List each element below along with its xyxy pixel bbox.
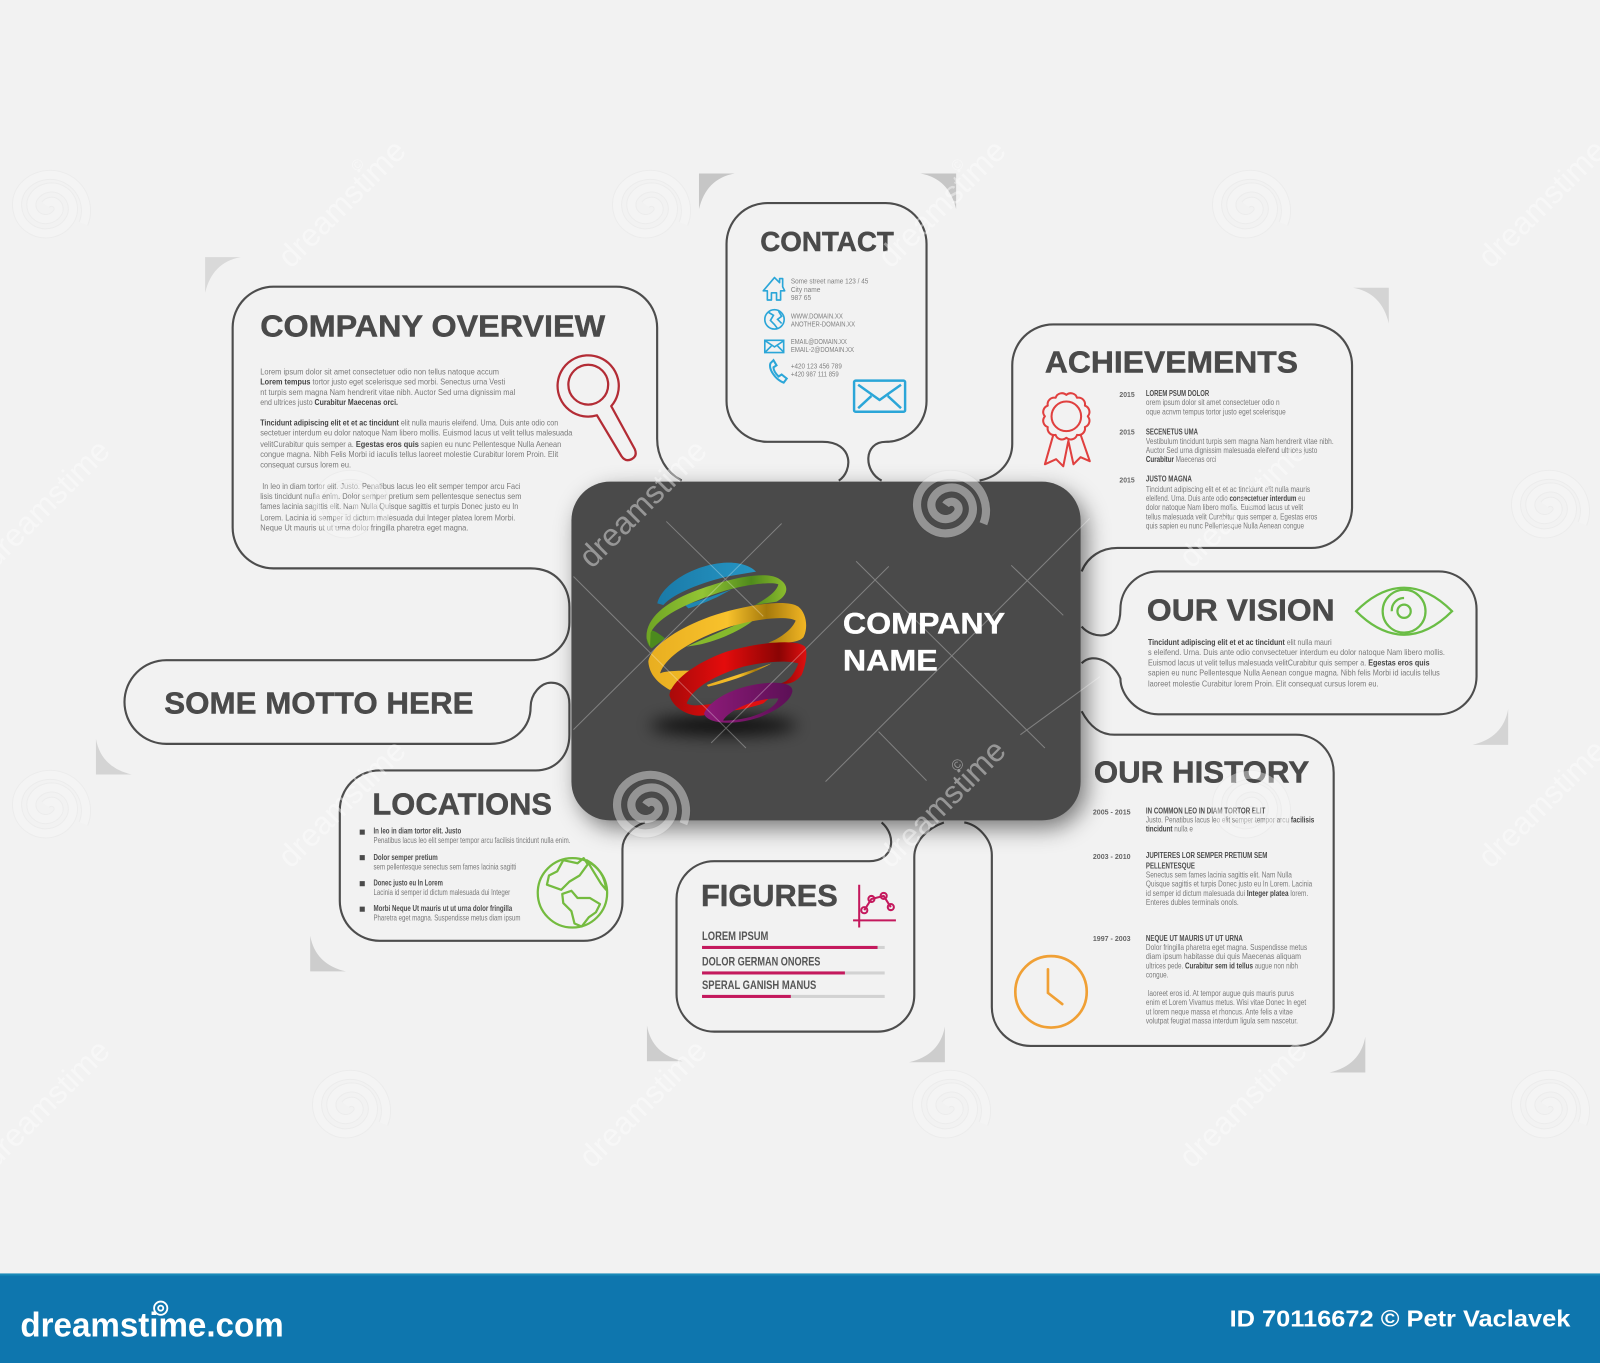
logo: ribbon sphere [646,563,806,736]
text block: overview paragraphs: end ultrices justo Curabitur Maecenas orci. [260,397,398,407]
text block: history timeline: id semper id dictum malesuada dui Integer platea lorem. [1146,888,1308,898]
text block: overview paragraphs: sectetuer interdum eu dolor natoque Nam libero mollis. Euismod lacus ut velit tellus malesuada [260,428,573,438]
heading: figures: FIGURES [701,879,838,913]
heading: our history: OUR HISTORY [1094,756,1309,790]
text block: contact details: EMAIL@DOMAIN.XX [791,337,847,346]
outline: contact [727,203,927,481]
text block: overview paragraphs: consequat cursus lorem eu. [260,459,351,469]
text block: overview paragraphs: lisis tincidunt nulla enim. Dolor semper pretium sem pellentesque senectus sem [260,491,521,501]
footer credit: ID 70116672 © Petr Vaclavek [1230,1306,1571,1332]
text block: achievement timeline: SECENETUS UMA [1146,428,1198,437]
bar chart: DOLOR GERMAN ONORES [702,955,821,968]
text block: history timeline: diam ipsum habitasse dui quis Maecenas aliquam [1146,951,1301,961]
icon: magnifier [558,355,636,460]
icon: small mail [765,340,784,353]
central dark card [571,482,1087,829]
text block: vision: Tincidunt adipiscing elit et et ac tincidunt elit nulla mauri [1148,637,1332,647]
heading: our vision: OUR VISION [1147,593,1335,627]
watermark wordmarks: dreamstime [1171,1032,1314,1174]
text block: location list: Pharetra eget magna. Suspendisse metus diam ipsum [373,912,520,922]
text block: history timeline: laoreet eros id. At tempor augue quis mauris purus [1148,988,1294,998]
text block: overview paragraphs: Lorem ipsum dolor sit amet consectetuer odio non tellus natoque accum [260,366,499,376]
text block: history timeline: NEQUE UT MAURIS UT UT URNA [1146,934,1243,943]
watermark wordmarks: © [348,155,368,175]
text block: achievement timeline: tellus malesuada velit Curabitur quis semper a. Egestas eros [1146,511,1317,521]
text block: history timeline: JUPITERES LOR SEMPER PRETIUM SEM [1146,851,1267,860]
text block: location list: Morbi Neque Ut mauris ut ut urna dolor fringilla [373,904,513,913]
text block: achievement timeline: orem ipsum dolor sit amet consectetuer odio n [1146,397,1280,407]
watermark wordmarks: © [948,155,968,175]
text block: achievement timeline: Curabitur Maecenas orci [1146,454,1216,464]
text block: vision: s eleifend. Urna. Duis ante odio convsectetuer interdum eu dolor natoque Nam libero mollis. [1148,647,1445,657]
panel: motto: SOME MOTTO HERE [164,686,473,720]
folded corner accents [96,173,1508,1072]
footer banner [0,1273,1600,1363]
text block: overview paragraphs: Lorem. Lacinia id semper id dictum malesuada dui Integer platea lorem Morbi. [260,512,515,522]
company name: NAME [843,644,938,677]
panel: locations [360,787,607,928]
text block: contact details: City name [791,285,820,294]
text block: overview paragraphs: Lorem tempus tortor justo eget scelerisque sed morbi. Senectus urna Vesti [260,377,505,387]
heading: achievements: ACHIEVEMENTS [1045,345,1298,379]
text block: overview paragraphs: Tincidunt adipiscing elit et et ac tincidunt elit nulla mauris eleifend. Urna. Duis ante odio con [260,418,558,428]
text block: achievement timeline [1119,389,1334,531]
text block: contact details: 987 65 [791,293,811,302]
text block: history timeline: congue. [1146,970,1168,980]
icon: clock [1015,956,1087,1028]
bar chart: LOREM IPSUM [702,930,768,943]
heading: contact: CONTACT [760,226,894,257]
outline: figures [677,822,944,1032]
watermark wordmarks: dreamstime [870,132,1013,274]
text block: achievement timeline: 2015 [1119,476,1135,485]
text block: contact details [791,277,868,379]
text block: history timeline: ultrices pede. Curabitur sem id tellus augue non nibh [1146,960,1298,970]
text block: history timeline: PELLENTESQUE [1146,861,1195,870]
text block: history timeline: 2005 - 2015 [1093,807,1131,816]
text block: contact details: ANOTHER-DOMAIN.XX [791,320,855,329]
text block: history timeline: Justo. Penatibus lacus leo elit semper tempor arcu facilisis [1146,814,1315,824]
text block: achievement timeline: eleifend. Urna. Duis ante odio consectetuer interdum eu [1146,493,1305,503]
text block: history timeline: 1997 - 2003 [1093,934,1131,943]
company name: COMPANY [843,608,1005,641]
text block: history timeline: enim et Lorem Vivamus metus. Wisi vitae Donec In eget [1146,997,1307,1007]
icon: award ribbon [1043,393,1090,466]
text block: history timeline: tincidunt nulla e [1146,824,1193,834]
text block: history timeline: Senectus sem fames lacinia sagittis elit. Nam Nulla [1146,870,1292,880]
text block: overview paragraphs: nt turpis sem magna Nam hendrerit vitae nibh. Auctor Sed urna dignissim mal [260,387,515,397]
text block: achievement timeline: JUSTO MAGNA [1146,475,1192,484]
text block: location list: Lacinia id semper id dictum malesuada dui Integer [373,887,510,897]
text block: achievement timeline: LOREM PSUM DOLOR [1146,389,1209,398]
text block: location list: sem pellentesque senectus sem fames lacinia sagitti [373,861,516,871]
text block: achievement timeline: oque acnvm tempus tortor justo eget scelerisque [1146,406,1286,416]
panel: contact [760,226,905,412]
text block: overview paragraphs: Neque Ut mauris ut ut urna dolor fringilla pharetra eget magna. [260,523,468,533]
text block: contact details: Some street name 123 / 45 [791,277,868,286]
panel: our vision [1147,588,1452,689]
outline: achievements [980,324,1352,571]
text block: achievement timeline: dolor natoque Nam libero mollis. Euismod lacus ut velit [1146,502,1304,512]
text block: history timeline: Quisque sagittis et turpis Donec justo eu In Lorem. Lacinia [1146,879,1312,889]
icon: earth globe [538,858,607,928]
text block: achievement timeline: 2015 [1119,428,1135,437]
watermark wordmarks: dreamstime [270,732,413,874]
text block: achievement timeline: 2015 [1119,390,1135,399]
watermark wordmarks: dreamstime [870,732,1013,874]
text block: location list: Dolor semper pretium [373,853,438,862]
text block: history timeline: Enteres dubles terminals onols. [1146,897,1239,907]
text block: overview paragraphs: velitCurabitur quis semper a. Egestas eros quis sapien eu nunc Pellentesque Nulla Aenean [260,439,561,449]
text block: history timeline: ut lorem neque massa et rhoncus. Ante felis a vitae [1146,1006,1293,1016]
icon: large envelope [854,381,905,412]
text block: achievement timeline: Auctor Sed urna dignissim malesuada eleifend ultrices justo [1146,445,1318,455]
text block: history timeline [1093,806,1315,1025]
heading: locations: LOCATIONS [372,787,552,821]
company name [843,608,1005,677]
watermark wordmarks: dreamstime [571,1032,714,1174]
watermark spirals [6,161,1598,1152]
text block: location list: Donec justo eu In Lorem [373,879,443,888]
watermark wordmarks [0,132,1600,1174]
bar chart [702,930,885,998]
text block: location list: Penatibus lacus leo elit semper tempor arcu facilisis tincidunt nulla enim. [373,835,570,845]
text block: location list [360,827,570,922]
text block: achievement timeline: Tincidunt adipiscing elit et et ac tincidunt elit nulla mauris [1146,484,1310,494]
text block: contact details: +420 123 456 789 [791,361,842,370]
outline: overview, motto and locations [124,287,682,941]
icon: phone [770,360,787,383]
panel: company overview [260,310,636,533]
text block: achievement timeline: Vestibulum tincidunt turpis sem magna Nam hendrerit vitae nibh. [1146,436,1334,446]
text block: overview paragraphs: congue magna. Nibh Felis Morbi id iaculis tellus laoreet molestie Curabitur lorem Proin. Elit [260,449,559,459]
watermark wordmarks: dreamstime [571,432,714,574]
text block: history timeline: 2003 - 2010 [1093,852,1131,861]
footer logo spiral [154,1302,167,1315]
panel: our history [1015,756,1315,1028]
footer logo: dreamstime.com [20,1307,284,1345]
text block: overview paragraphs: In leo in diam tortor elit. Justo. Penatibus lacus leo elit semper tempor arcu Faci [262,481,521,491]
panel: achievements [1043,345,1334,531]
text block: contact details: EMAIL-2@DOMAIN.XX [791,345,854,354]
text block: vision: laoreet molestie Curabitur lorem Proin. Elit consequat cursus lorem eu. [1148,679,1379,689]
outline: vision [1082,571,1477,714]
icon: eye [1356,588,1452,635]
text block: history timeline: IN COMMON LEO IN DIAM TORTOR ELIT [1146,806,1265,815]
text block: location list: In leo in diam tortor elit. Justo [373,827,461,836]
panel: figures [701,879,896,998]
text block: vision: sapien eu nunc Pellentesque Nulla Aenean congue magna. Nibh felis Morbi id iaculis tellus [1148,668,1440,678]
watermark wordmarks: © [948,755,968,775]
bar chart: SPERAL GANISH MANUS [702,979,816,992]
icon: globe [765,310,784,329]
text block: vision [1148,637,1445,689]
heading: company overview: COMPANY OVERVIEW [260,310,605,344]
text block: history timeline: Dolor fringilla pharetra eget magna. Suspendisse metus [1146,942,1307,952]
text block: achievement timeline: quis sapien eu nunc Pellentesque Nulla Aenean congue [1146,521,1304,531]
text block: overview paragraphs: fames lacinia sagittis elit. Nam Nulla Quisque sagittis et turpis Donec justo eu In [260,501,519,511]
thin cross-hair lines on the card [573,518,1100,782]
icon: line chart [853,885,896,928]
watermark wordmarks: dreamstime [1171,432,1314,574]
outline: history [964,711,1334,1046]
watermark wordmarks: dreamstime [270,132,413,274]
text block: contact details: +420 987 111 859 [791,370,839,379]
text block: overview paragraphs [260,366,573,533]
text block: vision: Euismod lacus ut velit tellus malesuada velitCurabitur quis semper a. Egestas eros quis [1148,657,1430,667]
icon: house [763,278,785,300]
text block: contact details: WWW.DOMAIN.XX [791,311,843,320]
text block: history timeline: volutpat feugiat massa interdum ligula sem nascetur. [1146,1015,1298,1025]
